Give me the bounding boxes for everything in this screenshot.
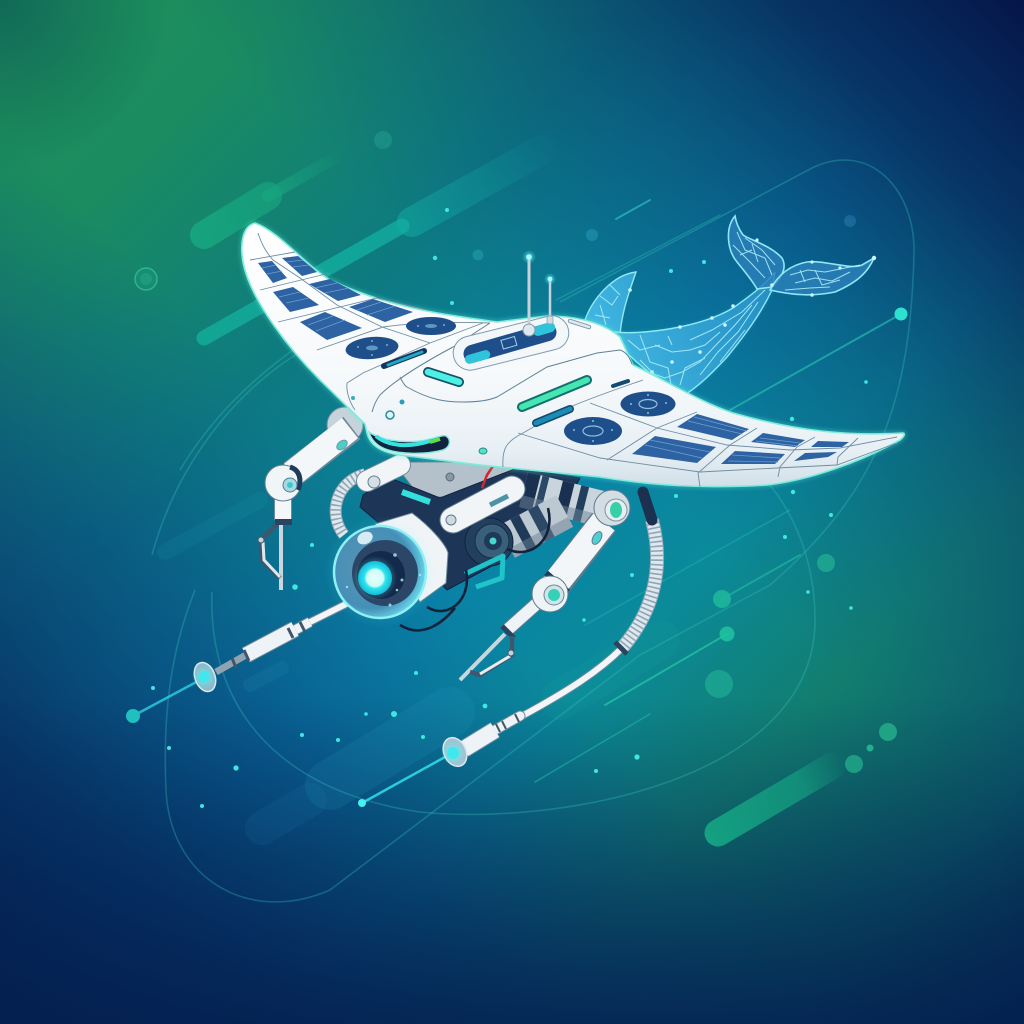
front probe (310, 602, 350, 622)
ribbed hose (622, 520, 657, 648)
undercarriage machinery (360, 462, 606, 630)
right arm with gripper (460, 490, 630, 680)
left wing discs (345, 317, 456, 361)
whale circuit traces (595, 232, 860, 390)
background streaks and capsules (165, 148, 832, 833)
lens disc (465, 518, 513, 566)
background particles (126, 131, 908, 808)
manta wings and body (242, 223, 904, 487)
lower cylinder (498, 495, 573, 558)
mouth light (369, 432, 449, 453)
probe head (495, 716, 520, 730)
right wing discs (564, 392, 676, 445)
dorsal fin (585, 272, 636, 335)
background orbit outlines (152, 160, 914, 902)
green light bar (522, 380, 587, 407)
left wing solar panels (258, 256, 413, 340)
left hose and lens probe (190, 474, 365, 695)
digital whale tail (585, 216, 876, 394)
whale glow (617, 272, 775, 394)
right fluke (770, 258, 874, 295)
right wing solar panels (632, 414, 849, 464)
dark housing (360, 468, 580, 590)
upper tube (367, 465, 400, 481)
cockpit surround (450, 312, 572, 374)
wing surface (242, 223, 904, 487)
top vent (570, 321, 589, 327)
left arm with gripper (258, 407, 363, 590)
antennas (522, 250, 556, 336)
cyan handle (465, 556, 503, 587)
whale body (615, 272, 775, 394)
cyan light pill (428, 372, 459, 382)
rear hose and probe (439, 492, 657, 770)
sensors (386, 411, 394, 419)
blue indicator bar (536, 409, 570, 423)
white tube (453, 489, 512, 520)
wing glow (242, 223, 904, 487)
cables (400, 508, 549, 630)
grey top block (393, 462, 520, 497)
left wing seams (250, 233, 490, 410)
camera barrel (375, 513, 448, 602)
cockpit panel (461, 321, 559, 365)
ribbed cylinder (519, 472, 606, 526)
red wire (482, 466, 493, 488)
right wing seams (503, 380, 897, 487)
glowing lens (324, 516, 436, 628)
left fluke (728, 216, 784, 289)
shell seam lines (372, 323, 632, 412)
background data lines (133, 200, 901, 803)
